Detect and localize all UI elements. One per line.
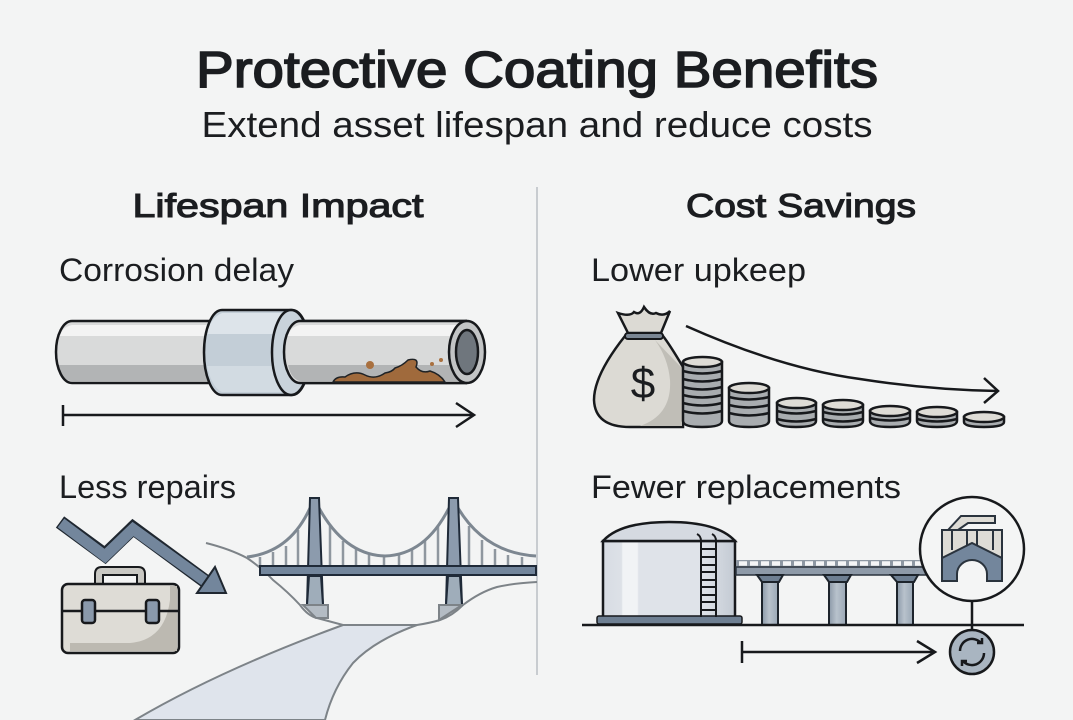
title: Protective Coating Benefits [196, 41, 878, 98]
icon: toolbox [62, 567, 179, 653]
label: less repairs: Less repairs [59, 469, 236, 505]
pipe body [56, 321, 467, 383]
coin stack 4 [823, 400, 863, 427]
arrow: declining upkeep cost [686, 326, 998, 403]
bridge deck [260, 566, 536, 575]
heading: lifespan impact: Lifespan Impact [132, 187, 424, 224]
coin stack 5 [870, 406, 910, 427]
subtitle: Extend asset lifespan and reduce costs [202, 104, 872, 145]
bridge tower left [303, 498, 328, 618]
coin stacks [683, 357, 1004, 427]
heading: cost savings: Cost Savings [686, 187, 916, 224]
support pier 2 [824, 575, 851, 625]
support pier 1 [757, 575, 783, 625]
pipe opening [449, 321, 485, 383]
illustration: suspension bridge and river [135, 498, 537, 720]
walkway railing [736, 560, 926, 567]
icon: falling repair trend arrow [60, 522, 226, 593]
illustration: elevated pipe rack [736, 560, 926, 625]
coating collar [204, 310, 310, 395]
rust patch [333, 358, 445, 382]
ground line [582, 624, 1024, 626]
coin stack 6 [917, 407, 957, 427]
arrow: lifespan timeline [63, 403, 474, 427]
main cables [247, 508, 536, 557]
icon: money bag [594, 307, 683, 427]
suspender cables [260, 526, 522, 566]
label: fewer replacements: Fewer replacements [591, 469, 901, 505]
river [135, 625, 417, 720]
label: lower upkeep: Lower upkeep [591, 252, 806, 288]
icon: coated pipe with corrosion [56, 310, 485, 395]
tank ladder [697, 534, 716, 617]
arrow: extended replacement interval [742, 641, 935, 663]
label: corrosion delay: Corrosion delay [59, 252, 294, 288]
icon: magnified bridge section [920, 497, 1024, 630]
coin stack 3 [777, 398, 816, 427]
riverbanks [206, 543, 537, 625]
support pier 3 [891, 575, 918, 625]
icon: replacement cycle [950, 630, 994, 674]
icon: storage tank [597, 522, 742, 624]
coin stack 1 [683, 357, 722, 427]
dollar sign: $ [631, 359, 655, 408]
bridge tower right [439, 498, 462, 620]
centre divider [536, 187, 538, 675]
exposed pipe section [284, 321, 467, 383]
rack deck [736, 567, 926, 575]
coin stack 7 [964, 412, 1004, 427]
coin stack 2 [729, 383, 769, 427]
